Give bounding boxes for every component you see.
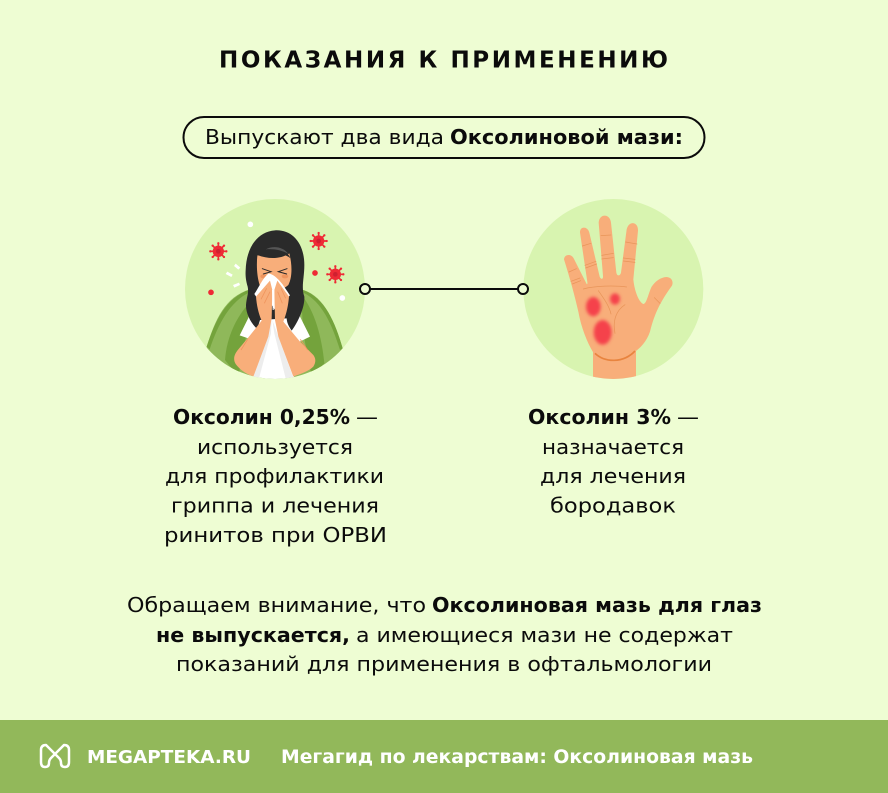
text block: oxolin 0.25%: Оксолин 0,25% bbox=[173, 405, 350, 429]
text block: oxolin 3% bbox=[528, 405, 699, 518]
text block: oxolin 0.25%: используется bbox=[197, 435, 353, 459]
text block: oxolin 3%: — bbox=[677, 405, 699, 429]
callout: two kinds of ointment bbox=[184, 117, 704, 158]
tissue bbox=[254, 273, 290, 310]
face bbox=[257, 253, 291, 290]
hair bbox=[246, 230, 304, 331]
text block: oxolin 0.25%: для профилактики bbox=[165, 464, 384, 488]
illustration: hand with warts bbox=[523, 199, 703, 383]
text block: oxolin 3%: бородавок bbox=[550, 494, 676, 518]
icon: megapteka logo bbox=[41, 745, 69, 767]
arms and hands bbox=[234, 281, 272, 377]
virus particles bbox=[208, 221, 345, 301]
callout: two kinds of ointment: Оксолиновой мази: bbox=[450, 125, 683, 149]
note about eye ointment: Оксолиновая мазь для глаз bbox=[432, 593, 762, 617]
text block: oxolin 3%: для лечения bbox=[540, 464, 686, 488]
text block: oxolin 0.25%: гриппа и лечения bbox=[171, 494, 379, 518]
footer band bbox=[0, 720, 888, 793]
brand name: MEGAPTEKA.RU bbox=[87, 747, 251, 768]
palm and fingers bbox=[564, 216, 673, 357]
creases bbox=[569, 235, 660, 333]
connector line between the circles bbox=[360, 284, 528, 294]
shirt bbox=[240, 316, 310, 379]
note about eye ointment: показаний для применения в офтальмологии bbox=[176, 652, 712, 676]
note about eye ointment bbox=[127, 593, 762, 676]
text block: oxolin 3%: назначается bbox=[542, 435, 684, 459]
note about eye ointment: не выпускается, bbox=[156, 623, 350, 647]
text block: oxolin 0.25%: ринитов при ОРВИ bbox=[164, 523, 387, 547]
footer caption: Мегагид по лекарствам: Оксолиновая мазь bbox=[281, 746, 753, 768]
sores bbox=[586, 293, 620, 345]
callout: two kinds of ointment: Выпускают два вида bbox=[205, 125, 444, 149]
illustration: woman sneezing bbox=[185, 199, 365, 390]
note about eye ointment: Обращаем внимание, что bbox=[127, 593, 426, 617]
wrist bbox=[593, 351, 636, 379]
title: ПОКАЗАНИЯ К ПРИМЕНЕНИЮ bbox=[219, 48, 668, 74]
text block: oxolin 3%: Оксолин 3% bbox=[528, 405, 671, 429]
blanket bbox=[206, 290, 343, 379]
text block: oxolin 0.25%: — bbox=[356, 405, 378, 429]
text block: oxolin 0.25% bbox=[164, 405, 387, 547]
note about eye ointment: а имеющиеся мази не содержат bbox=[356, 623, 733, 647]
